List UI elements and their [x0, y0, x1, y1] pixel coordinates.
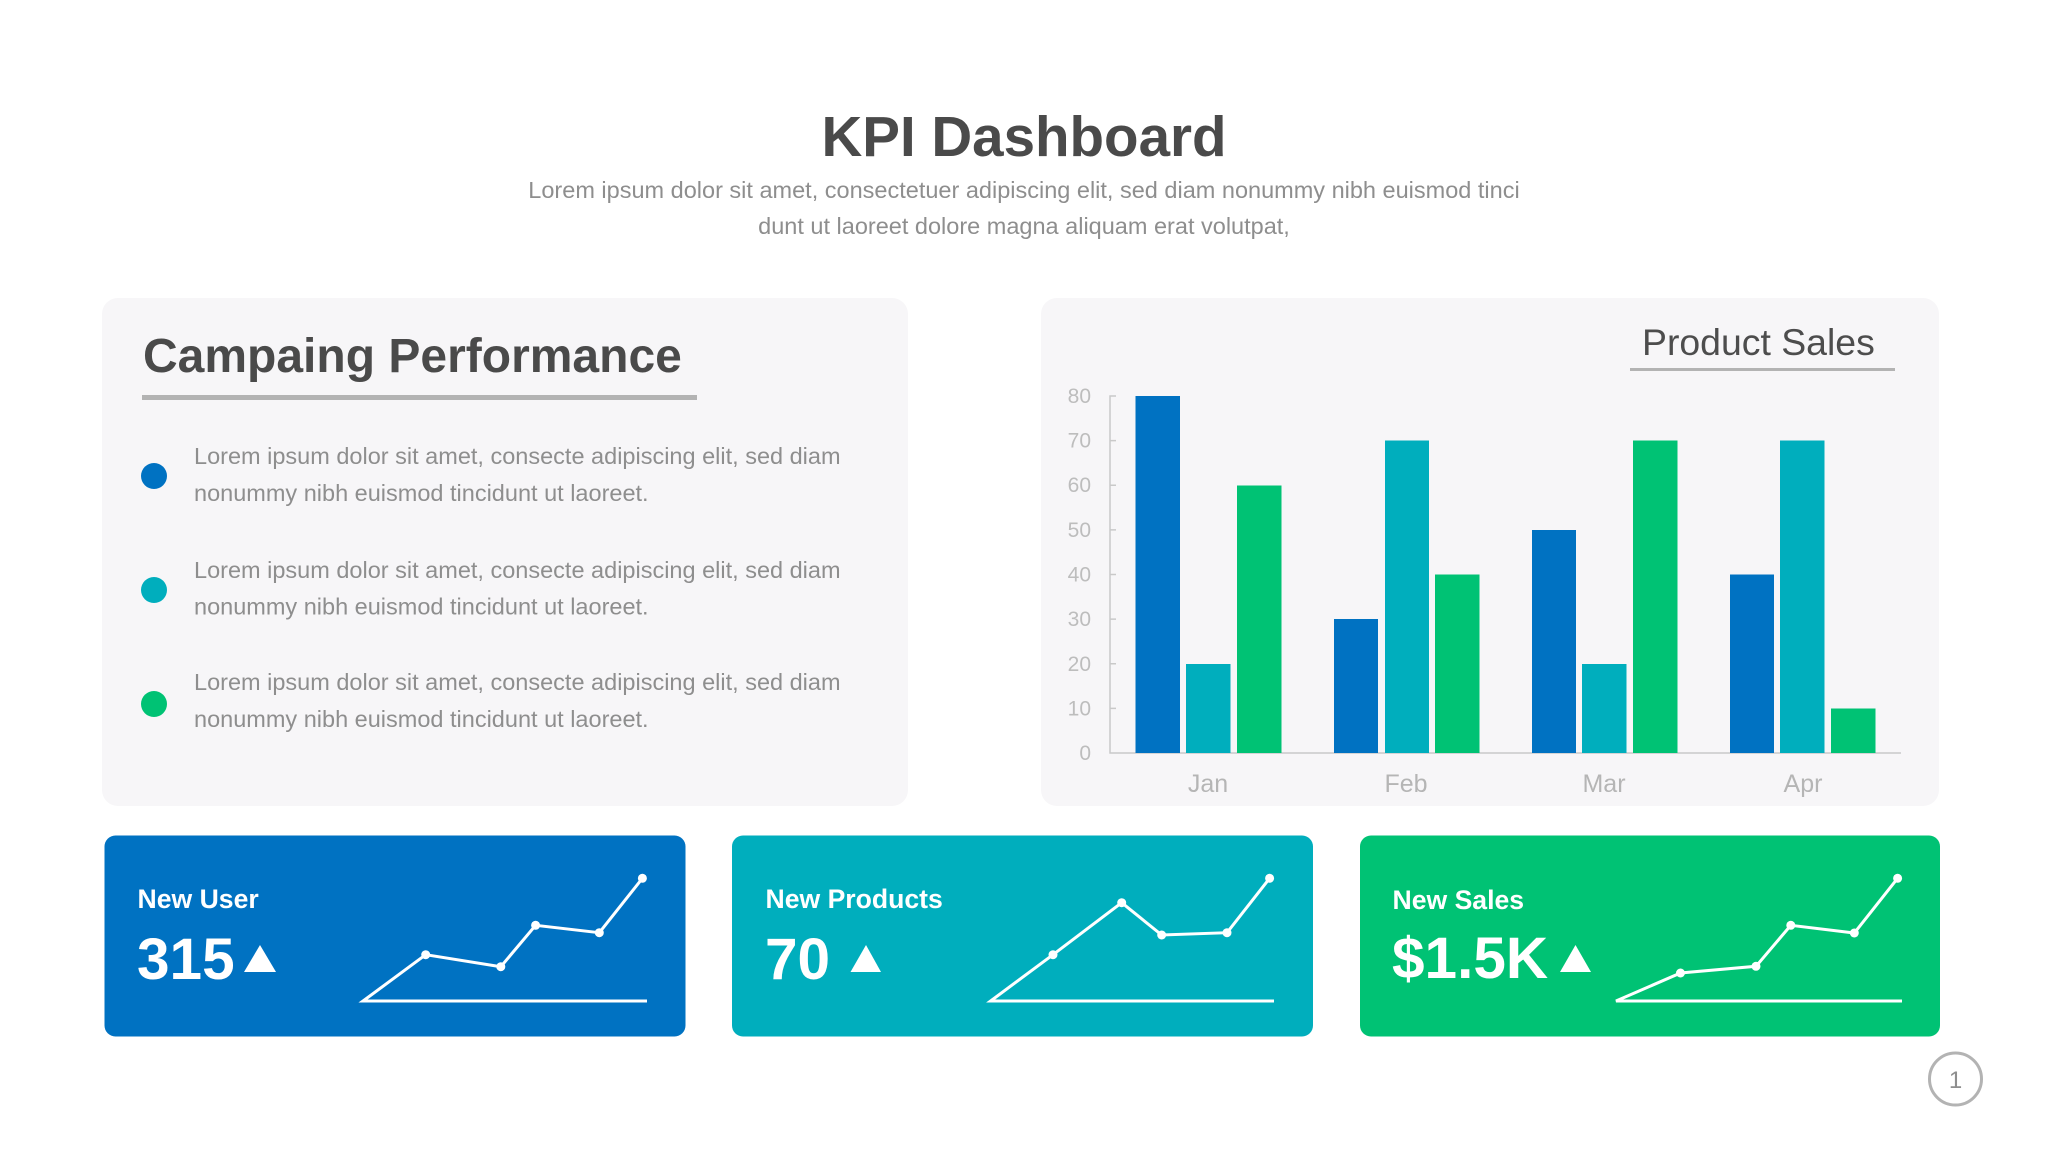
- subtitle text: [528, 177, 1520, 239]
- y axis labels: 10: [1068, 698, 1091, 720]
- bullet item 1: [141, 443, 841, 506]
- subtitle text: dunt ut laoreet dolore magna aliquam erat volutpat,: [758, 213, 1290, 239]
- y axis labels: 50: [1068, 519, 1091, 542]
- subtitle text: Lorem ipsum dolor sit amet, consectetuer adipiscing elit, sed diam nonummy nibh euismod tinci: [528, 177, 1520, 203]
- KPI card: New User: 315: [137, 927, 235, 992]
- KPI card: New Sales: $1.5K: [1392, 926, 1548, 991]
- panel: campaign performance: [102, 298, 908, 806]
- title: KPI Dashboard: [822, 105, 1226, 168]
- x axis labels: Mar: [1582, 770, 1626, 798]
- y axis labels: 40: [1068, 564, 1091, 586]
- x axis labels: [1188, 770, 1822, 798]
- bullet item 2: [141, 557, 841, 620]
- y axis labels: [1068, 385, 1091, 765]
- bars: Apr: [1730, 440, 1876, 753]
- icon: up triangle: [1560, 945, 1591, 972]
- KPI card: New Products: New Products: [766, 884, 943, 914]
- campaign heading: Campaing Performance: [143, 330, 682, 383]
- sparkline: [363, 874, 647, 1001]
- bullet item 3: Lorem ipsum dolor sit amet, consecte adipiscing elit, sed diam: [194, 669, 841, 695]
- KPI card: New User: New User: [138, 884, 259, 914]
- x axis labels: Feb: [1384, 770, 1428, 798]
- sparkline: [991, 874, 1274, 1001]
- page number badge: 1: [1949, 1067, 1962, 1094]
- chart axes: [1110, 396, 1901, 753]
- chart heading underline: [1630, 368, 1895, 371]
- page number badge: [1930, 1053, 1982, 1105]
- bars: Mar: [1532, 440, 1678, 753]
- bullet item 1: Lorem ipsum dolor sit amet, consecte adipiscing elit, sed diam: [194, 443, 841, 469]
- bar chart: [1068, 385, 1901, 798]
- bullet item 1: nonummy nibh euismod tincidunt ut laoreet.: [194, 480, 649, 506]
- x axis labels: Apr: [1784, 770, 1822, 798]
- KPI card: New User: [104, 836, 686, 1036]
- chart heading: Product Sales: [1642, 321, 1875, 363]
- icon: up triangle: [244, 945, 276, 972]
- bars: Feb: [1334, 440, 1480, 753]
- bullet item 2: Lorem ipsum dolor sit amet, consecte adipiscing elit, sed diam: [194, 557, 841, 583]
- y axis labels: 20: [1068, 653, 1091, 676]
- bullet item 3: [141, 669, 841, 732]
- panel: product sales: [1041, 298, 1939, 806]
- icon: up triangle: [850, 945, 881, 972]
- y axis labels: 70: [1068, 430, 1091, 452]
- y axis labels: 30: [1068, 608, 1091, 631]
- bullet item 2: nonummy nibh euismod tincidunt ut laoreet.: [194, 594, 649, 620]
- x axis labels: Jan: [1188, 770, 1228, 798]
- KPI card: New Products: [732, 836, 1313, 1036]
- sparkline: [1616, 874, 1902, 1001]
- bars: Jan: [1136, 396, 1282, 753]
- bullet item 3: nonummy nibh euismod tincidunt ut laoreet.: [194, 706, 649, 732]
- y axis labels: 80: [1068, 385, 1091, 408]
- KPI card: New Sales: [1360, 836, 1940, 1036]
- y axis labels: 60: [1068, 474, 1091, 497]
- KPI card: New Sales: New Sales: [1392, 885, 1524, 915]
- KPI card: New Products: 70: [765, 927, 830, 992]
- y axis labels: 0: [1079, 742, 1091, 765]
- heading underline: [142, 395, 697, 400]
